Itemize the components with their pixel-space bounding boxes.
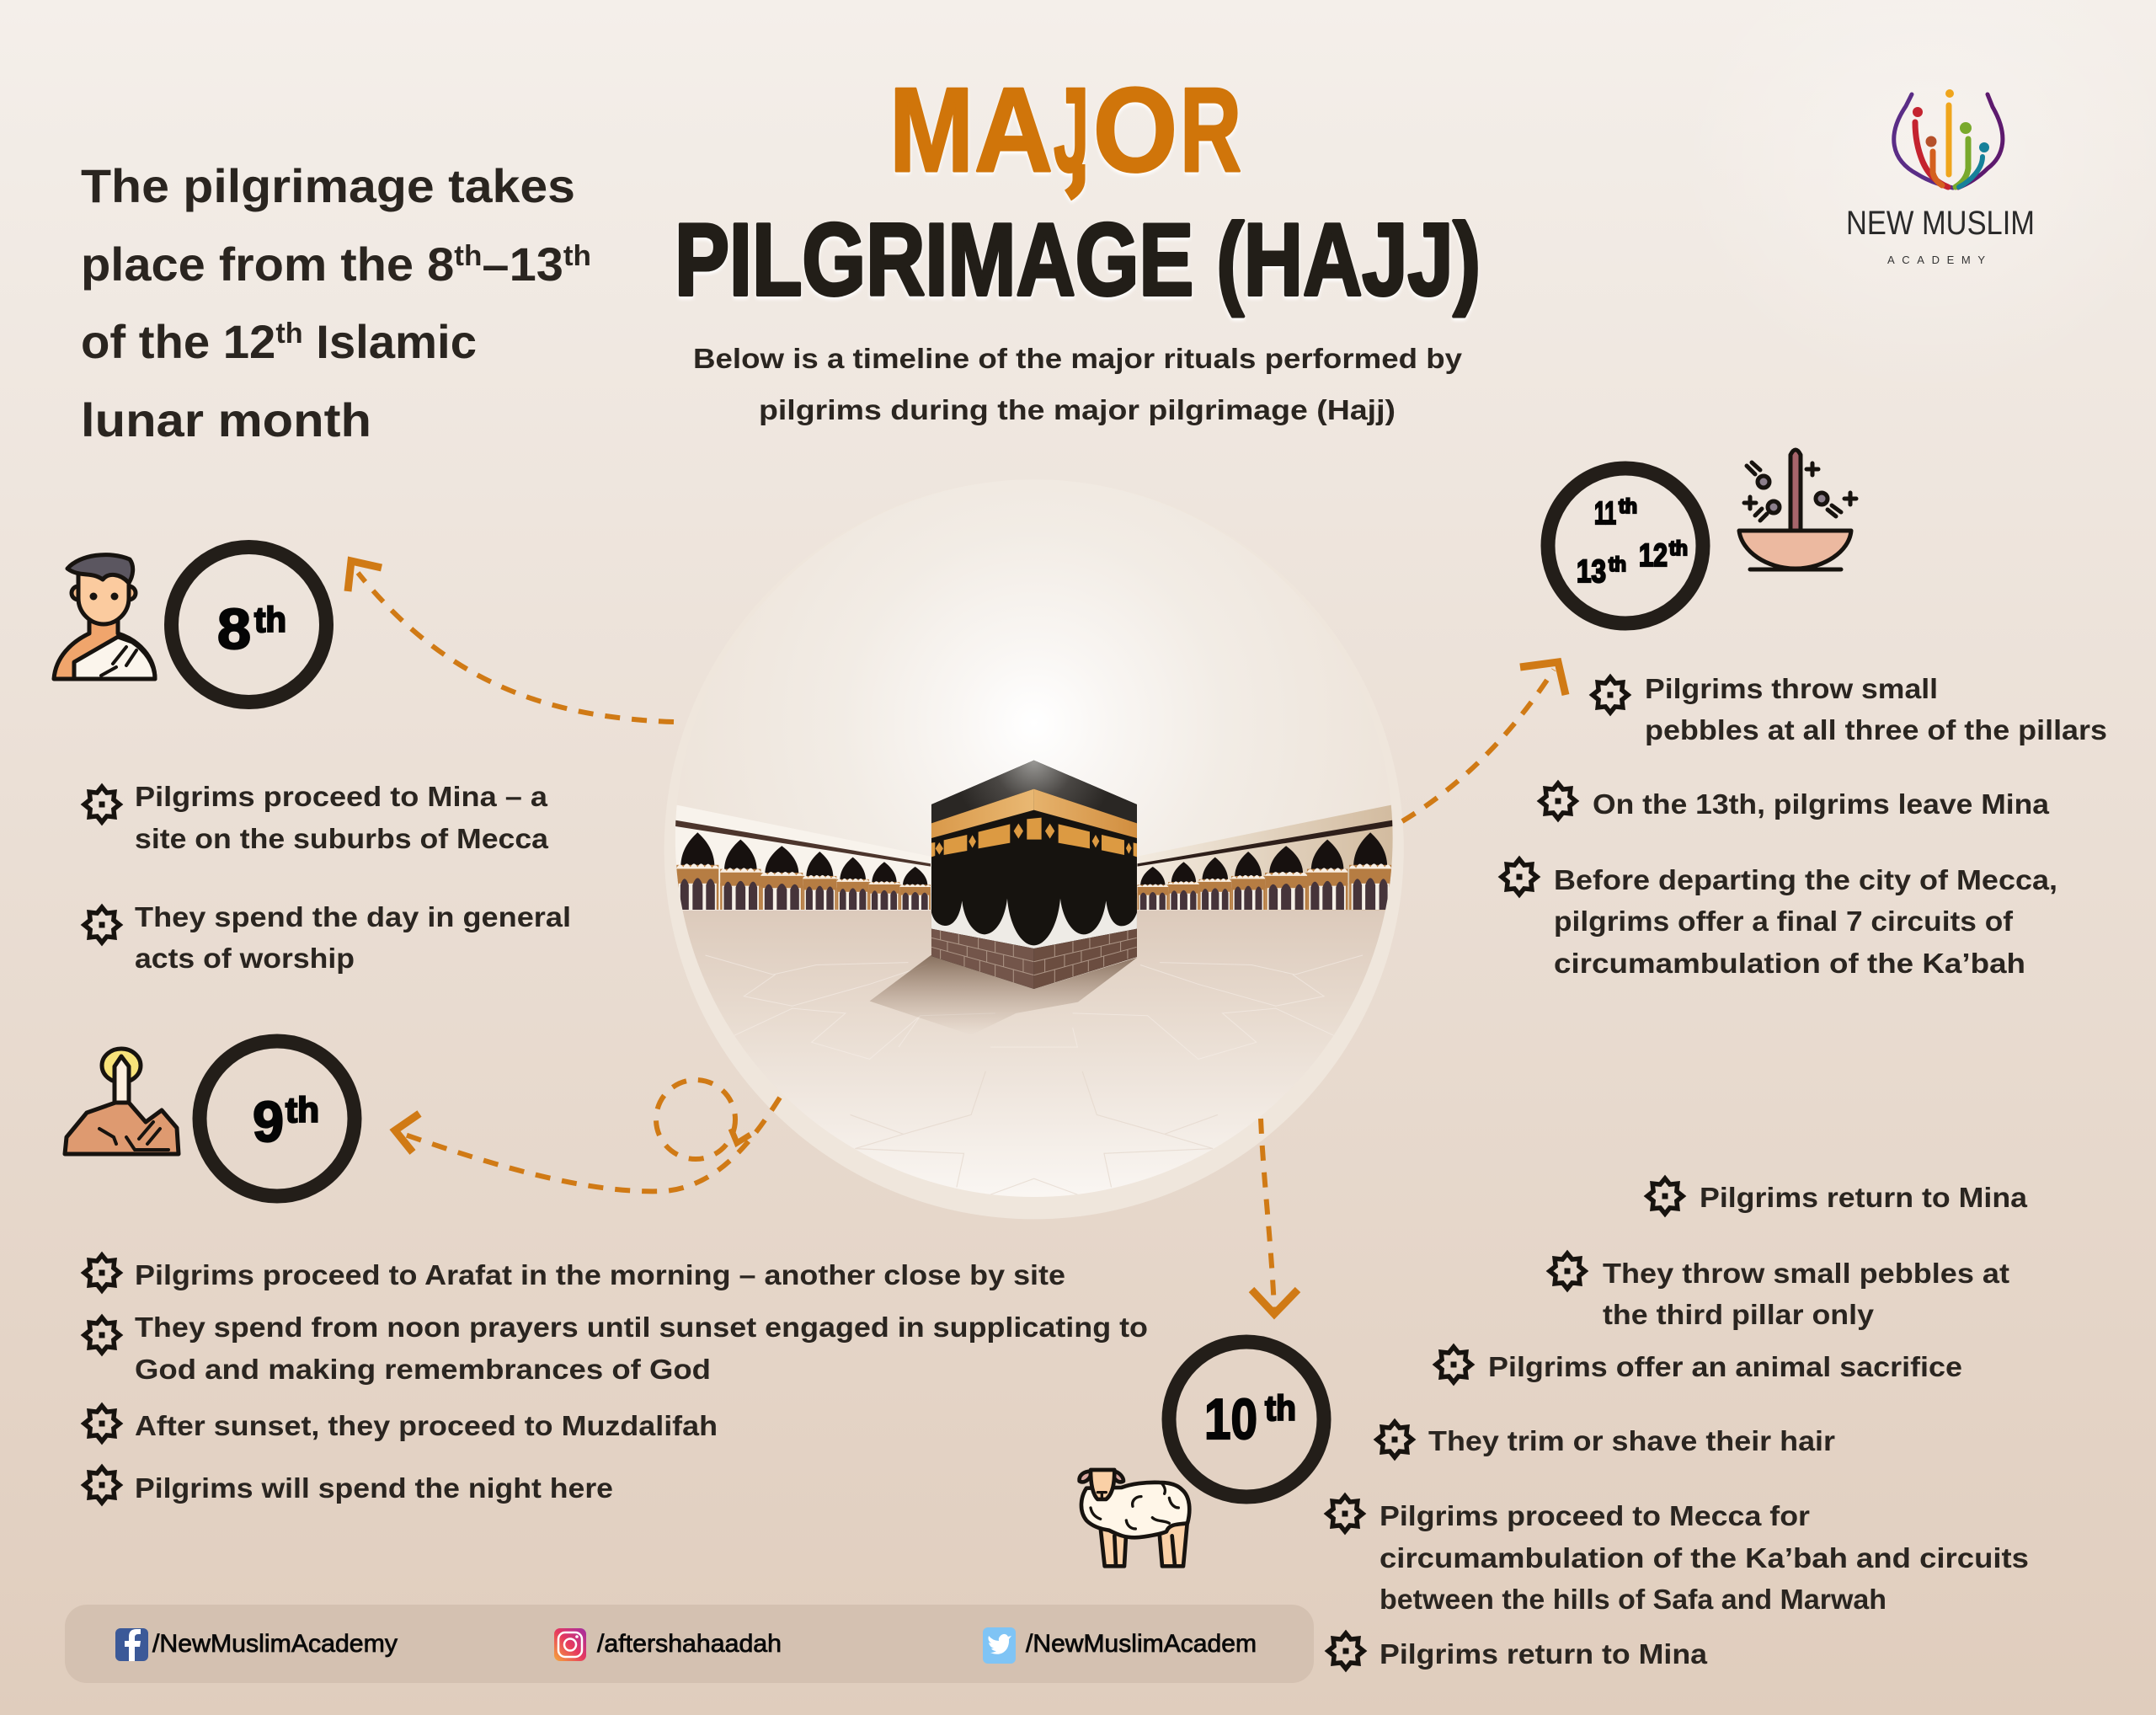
- intro heading: The pilgrimage takes: [81, 159, 575, 212]
- date ring: 9th: th: [286, 1090, 319, 1130]
- footer: social links: [65, 1605, 1314, 1683]
- bullet: night: Pilgrims will spend the night here: [135, 1472, 613, 1504]
- bullet: Arafat: Pilgrims proceed to Arafat in the morning – another close by site: [135, 1259, 1065, 1290]
- date ring: 10th: 10: [1204, 1387, 1257, 1451]
- bullet: proceed to Mecca: [1327, 1496, 2029, 1615]
- panel: 10th day: [1080, 1178, 2029, 1670]
- icon: pebbles and pillar: [1739, 450, 1856, 569]
- intro heading: [81, 159, 591, 446]
- right arcade: [1137, 804, 1394, 911]
- bullet: general worship: They spend the day in general: [135, 901, 571, 932]
- footer bar: [65, 1605, 1314, 1683]
- intro heading: place from the 8: [81, 238, 442, 291]
- bullet: proceed to Mecca: circumambulation of the Ka’bah and circuits: [1380, 1542, 2029, 1573]
- bullet: proceed to Mina: site on the suburbs of Mecca: [135, 823, 549, 854]
- intro heading: of the 12: [81, 315, 275, 368]
- title line: MAJOR: O: [1093, 63, 1177, 197]
- intro heading: –13: [482, 238, 563, 291]
- bullet: trim hair: They trim or shave their hair: [1428, 1425, 1835, 1456]
- bullet: third pillar: [1550, 1253, 2009, 1330]
- arrow: to 9th with loop: [395, 1080, 780, 1191]
- bullet list: 9th: [84, 1255, 1148, 1504]
- instagram link: [554, 1628, 782, 1661]
- title: [675, 63, 1481, 317]
- bullet: proceed to Mecca: between the hills of Safa and Marwah: [1380, 1584, 1886, 1615]
- logo glow: [1676, 0, 2156, 396]
- icon: pilgrim in ihram: [54, 555, 155, 679]
- bullet: proceed to Mecca: Pilgrims proceed to Mecca for: [1380, 1500, 1810, 1531]
- subtitle: [693, 343, 1463, 425]
- logo tagline: ACADEMY: [1887, 254, 1985, 266]
- title line: MAJOR: R: [1180, 63, 1241, 197]
- bullet: final circuits: [1502, 859, 2057, 979]
- panel: 9th day: [65, 1041, 1148, 1504]
- bullet list: 10th: [1327, 1178, 2029, 1670]
- logo mark: [1894, 89, 2003, 188]
- bullet: return to Mina again: Pilgrims return to Mina: [1380, 1638, 1708, 1670]
- date ring: 8th: 8: [217, 597, 251, 661]
- date ring: 11th 12th 13th: th: [1619, 495, 1637, 518]
- bullet: throw pebbles: pebbles at all three of the pillars: [1645, 714, 2107, 745]
- arrow: to 8th: [348, 561, 674, 722]
- bullet: return to Mina: Pilgrims return to Mina: [1700, 1182, 2028, 1213]
- date ring: 11th 12th 13th: [1548, 468, 1703, 623]
- title line: MAJOR: J: [1054, 63, 1089, 197]
- twitter link: [983, 1627, 1257, 1664]
- intro heading: th: [454, 240, 482, 272]
- instagram link: /aftershahaadah: [597, 1630, 782, 1658]
- central illustration: Ka'bah courtyard: [657, 472, 1411, 1219]
- title line: MAJOR: [889, 63, 1241, 197]
- panel: 11th to 13th days: [1502, 450, 2107, 979]
- panel: 8th day: [54, 548, 571, 974]
- bullet: throw pebbles: Pilgrims throw small: [1645, 673, 1938, 704]
- bullet: leave Mina: On the 13th, pilgrims leave Mina: [1593, 788, 2050, 820]
- date ring: 11th 12th 13th: 13: [1577, 554, 1606, 590]
- date ring: 11th 12th 13th: 12: [1639, 538, 1668, 574]
- bullet list: 8th: [84, 781, 571, 974]
- date ring: 10th: th: [1265, 1388, 1296, 1428]
- date ring: 8th: th: [254, 600, 286, 639]
- title line: PILGRIMAGE (HAJJ): PILGRIMAGE (HAJJ): [675, 202, 1481, 317]
- subtitle: pilgrims during the major pilgrimage (Hajj): [759, 394, 1396, 425]
- bullet: Muzdalifah: After sunset, they proceed to Muzdalifah: [135, 1410, 718, 1441]
- bullet: final circuits: circumambulation of the Ka’bah: [1554, 948, 2025, 979]
- arrow: to 10th: [1251, 1119, 1298, 1314]
- bullet: supplication: God and making remembrances of God: [135, 1354, 711, 1385]
- bullet: final circuits: pilgrims offer a final 7 circuits of: [1554, 906, 2014, 937]
- bullet: supplication: They spend from noon prayers until sunset engaged in supplicating to: [135, 1312, 1148, 1343]
- bullet list: 11th to 13th: [1502, 673, 2107, 979]
- bullet: proceed to Mina: [84, 781, 549, 854]
- intro heading: th: [563, 240, 591, 272]
- date ring: 9th: 9: [253, 1090, 284, 1154]
- bullet: proceed to Mina: Pilgrims proceed to Mina – a: [135, 781, 548, 812]
- bullet: supplication: [84, 1312, 1148, 1385]
- bullet: final circuits: Before departing the city of Mecca,: [1554, 864, 2057, 895]
- Ka'bah cube: [931, 761, 1137, 989]
- bullet: animal sacrifice: Pilgrims offer an animal sacrifice: [1488, 1351, 1962, 1382]
- bullet: third pillar: They throw small pebbles at: [1603, 1258, 2009, 1289]
- intro heading: th: [275, 318, 303, 350]
- date ring: 10th: [1169, 1342, 1324, 1497]
- bullet: throw pebbles: [1593, 673, 2107, 745]
- facebook link: /NewMuslimAcademy: [152, 1630, 398, 1658]
- icon: sheep: [1080, 1470, 1189, 1566]
- subtitle: Below is a timeline of the major rituals performed by: [693, 343, 1463, 374]
- outer pale ring: [664, 479, 1404, 1219]
- date ring: 11th 12th 13th: th: [1669, 537, 1688, 560]
- date ring: 11th 12th 13th: th: [1609, 553, 1626, 576]
- date ring: 8th: [172, 548, 327, 703]
- bullet: general worship: [84, 901, 571, 974]
- inner scene: [675, 514, 1393, 1197]
- icon: Mount Arafat with pillar: [65, 1049, 179, 1154]
- Ka'bah shadow: [869, 955, 1137, 1026]
- bullet: third pillar: the third pillar only: [1603, 1299, 1875, 1330]
- logo: New Muslim Academy: [1846, 89, 2035, 266]
- intro heading: Islamic: [303, 315, 477, 368]
- bullet: general worship: acts of worship: [135, 943, 355, 974]
- twitter link: /NewMuslimAcadem: [1026, 1630, 1257, 1658]
- intro heading: lunar month: [81, 393, 371, 446]
- bullet: return to Mina again: [1328, 1633, 1708, 1670]
- title line: MAJOR: A: [974, 63, 1053, 197]
- date ring: 11th 12th 13th: 11: [1594, 496, 1616, 532]
- title line: MAJOR: M: [889, 63, 974, 197]
- date ring: 9th: [200, 1041, 355, 1196]
- left arcade: [674, 804, 931, 911]
- arrow: to 11th-13th: [1402, 662, 1566, 821]
- logo wordmark: NEW MUSLIM: [1846, 205, 2035, 242]
